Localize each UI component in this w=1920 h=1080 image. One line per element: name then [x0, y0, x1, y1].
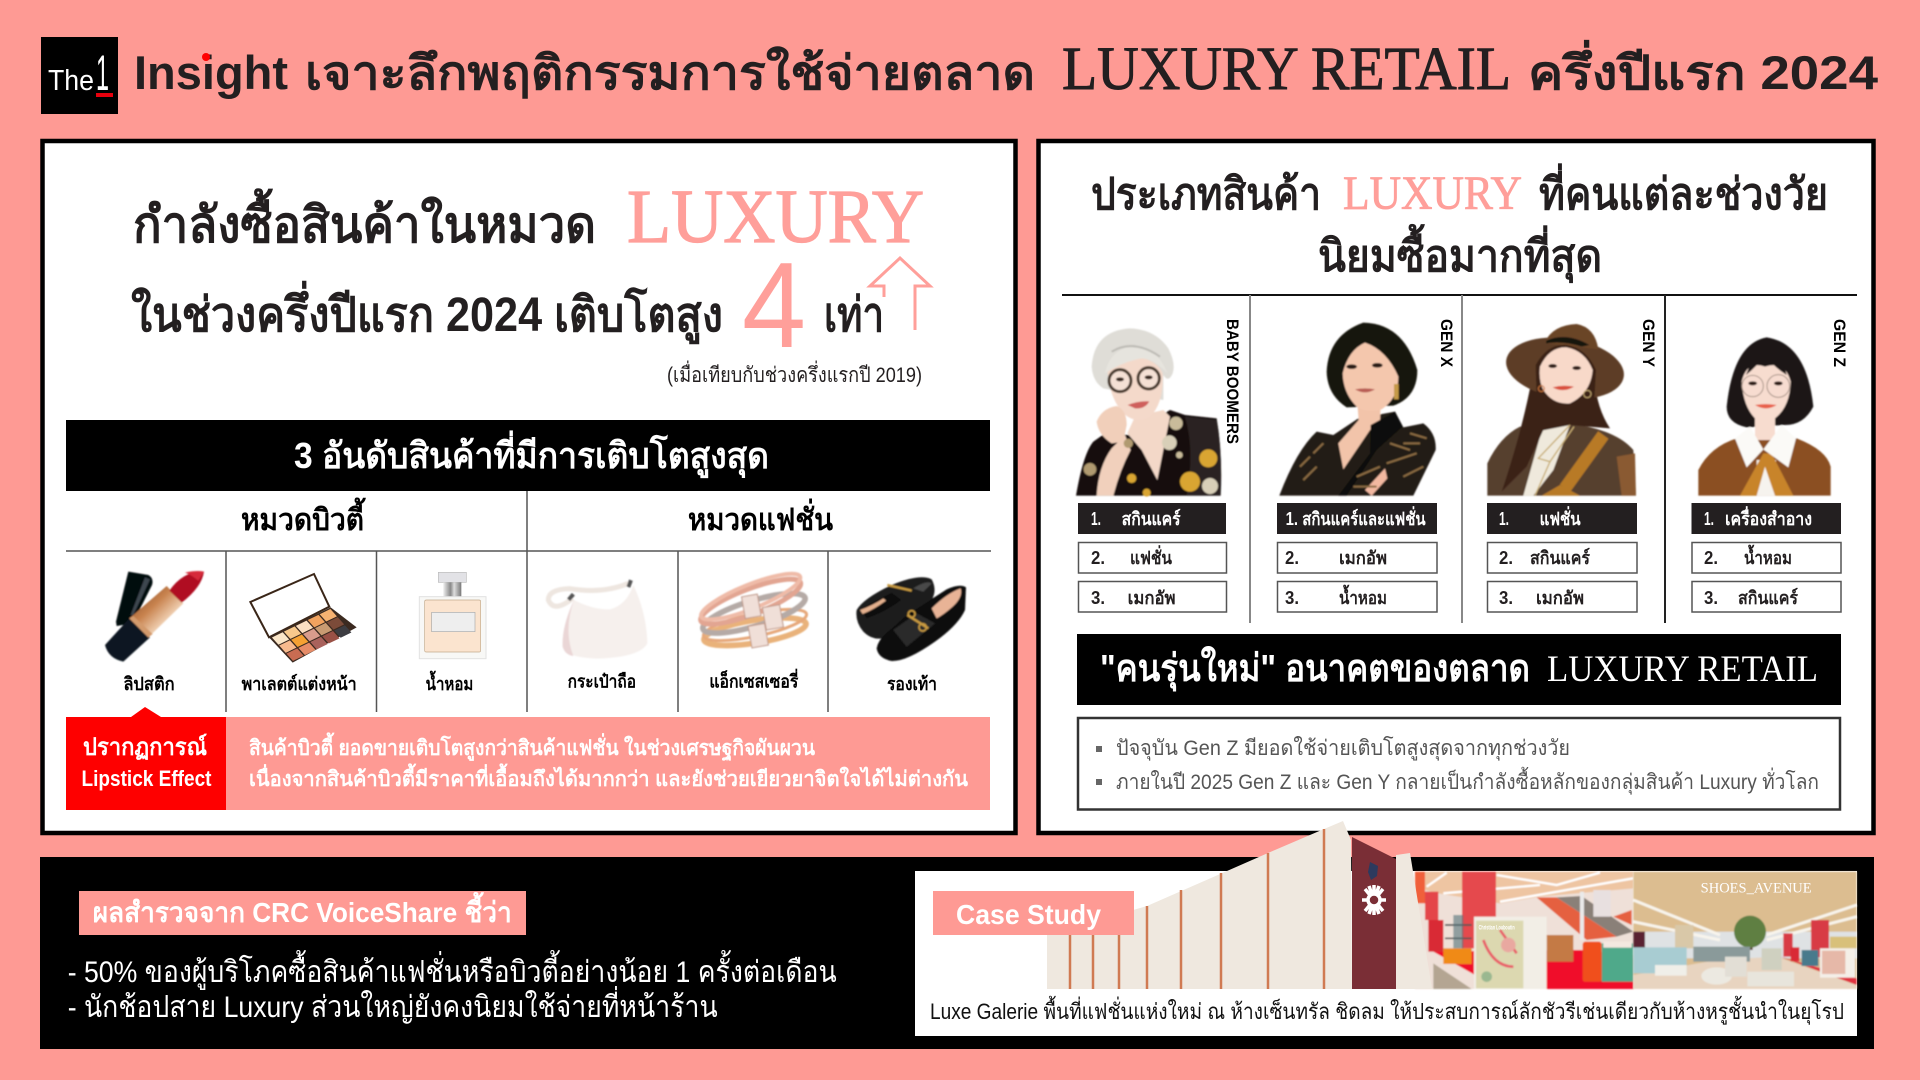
rank list	[1277, 503, 1437, 612]
rank list: 3.	[1285, 588, 1299, 608]
column: gen x	[1277, 319, 1456, 612]
photo: shoes avenue interior	[1633, 872, 1857, 989]
portrait: gen y	[1487, 324, 1636, 496]
icon: up arrow	[870, 258, 930, 330]
survey findings: - 50% ของผู้บริโภคซื้อสินค้าแฟชั่นหรือบิวตี้อย่างน้อย 1 ครั้งต่อเดือน	[68, 950, 837, 990]
headline: luxury spending: LUXURY	[627, 175, 924, 259]
rank list: เมกอัพ	[1536, 588, 1584, 608]
product: loafers: รองเท้า	[887, 674, 937, 694]
rank list: 3.	[1499, 588, 1513, 608]
rank list: 3.	[1091, 588, 1105, 608]
bullet box: ภายในปี 2025 Gen Z และ Gen Y กลายเป็นกำลังซื้อหลักของกลุ่มสินค้า Luxury ทั่วโลก	[1116, 767, 1819, 795]
callout: lipstick effect: ปรากฏการณ์	[83, 733, 207, 761]
callout: lipstick effect	[66, 707, 990, 810]
banner: new generation: LUXURY RETAIL	[1547, 649, 1818, 690]
title: เจาะลึกพฤติกรรมการใช้จ่ายตลาด	[305, 45, 1035, 99]
rank list: น้ำหอม	[1339, 584, 1387, 608]
rank list: น้ำหอม	[1744, 544, 1792, 568]
rank list: แฟชั่น	[1130, 545, 1173, 568]
heading: ประเภทสินค้า	[1091, 170, 1321, 219]
survey label	[79, 891, 526, 935]
label: case study: Case Study	[956, 899, 1101, 930]
photo: shoes avenue interior: SHOES_AVENUE	[1701, 880, 1812, 896]
case study card	[915, 821, 1857, 1036]
label: baby boomers: BABY BOOMERS	[1223, 319, 1242, 444]
product: lipstick	[105, 571, 204, 694]
callout: lipstick effect: เนื่องจากสินค้าบิวตี้มีราคาที่เอื้อมถึงได้มากกว่า และยังช่วยเยียวยาจิตใจได้ไม่ต่างกัน	[249, 763, 969, 791]
survey findings: - นักช้อปสาย Luxury ส่วนใหญ่ยังคงนิยมใช้จ่ายที่หน้าร้าน	[68, 986, 718, 1024]
label: gen z: GEN Z	[1830, 319, 1849, 367]
rank list: เครื่องสำอาง	[1725, 506, 1812, 529]
callout: lipstick effect: Lipstick Effect	[82, 766, 212, 791]
product: eyeshadow palette	[242, 574, 357, 694]
portrait: gen z	[1698, 337, 1831, 496]
rank list: 2.	[1499, 548, 1513, 568]
label: gen x: GEN X	[1437, 319, 1456, 368]
heading: LUXURY	[1343, 167, 1522, 220]
product: perfume: น้ำหอม	[426, 670, 473, 694]
heading: นิยมซื้อมากที่สุด	[1318, 223, 1602, 284]
rank list: 1. สกินแคร์และแฟชั่น	[1286, 506, 1426, 529]
product: bracelets	[696, 566, 809, 691]
rank list: 2.	[1091, 548, 1105, 568]
heading	[1091, 163, 1828, 284]
column: gen z	[1692, 319, 1849, 612]
photo: store interior one: Christian Louboutin	[1479, 925, 1515, 932]
panel: bottom band	[40, 821, 1874, 1049]
product: bracelets: แอ็กเซสเซอรี่	[709, 668, 799, 691]
product: perfume	[419, 572, 486, 694]
product: handbag	[548, 580, 647, 691]
logo: The 1	[41, 37, 118, 114]
label: gen y: GEN Y	[1639, 319, 1658, 368]
label: case study	[933, 891, 1134, 935]
rank list: 2.	[1704, 548, 1718, 568]
rank list	[1078, 503, 1226, 612]
headline: luxury spending	[131, 175, 924, 373]
rank list: เมกอัพ	[1339, 548, 1387, 568]
panel: products by generation	[1038, 141, 1874, 833]
category headings	[241, 497, 833, 537]
portrait: gen x	[1279, 323, 1436, 496]
banner: top 3 categories: 3 อันดับสินค้าที่มีการเติบโตสูงสุด	[294, 430, 769, 479]
headline: luxury spending: 4	[742, 237, 806, 373]
rank list: เมกอัพ	[1128, 588, 1176, 608]
headline: luxury spending: เท่า	[824, 289, 884, 342]
column: gen y	[1487, 319, 1658, 612]
panel: luxury growth	[42, 141, 1016, 833]
category headings: หมวดแฟชั่น	[688, 498, 833, 537]
rank list: แฟชั่น	[1540, 506, 1581, 529]
category headings: หมวดบิวตี้	[241, 497, 366, 537]
title: Insight	[134, 46, 288, 99]
title	[134, 36, 1878, 103]
rank list	[1487, 503, 1637, 612]
rank list: 3.	[1704, 588, 1718, 608]
logo: The 1: The	[48, 65, 94, 97]
headline: luxury spending: ในช่วงครึ่งปีแรก 2024 เติบโตสูง	[131, 280, 723, 345]
comparison note: (เมื่อเทียบกับช่วงครึ่งแรกปี 2019)	[667, 360, 922, 387]
rank list: สกินแคร์	[1122, 508, 1181, 529]
product: eyeshadow palette: พาเลตต์แต่งหน้า	[242, 673, 357, 694]
headline: luxury spending: กำลังซื้อสินค้าในหมวด	[133, 188, 596, 253]
portrait: baby boomer	[1076, 328, 1221, 497]
bullet box: ปัจจุบัน Gen Z มียอดใช้จ่ายเติบโตสูงสุดจากทุกช่วงวัย	[1116, 736, 1570, 761]
rank list: สกินแคร์	[1738, 587, 1798, 608]
rank list: 1.	[1091, 509, 1101, 529]
callout: lipstick effect: สินค้าบิวตี้ ยอดขายเติบโตสูงกว่าสินค้าแฟชั่น ในช่วงเศรษฐกิจผันผวน	[249, 732, 816, 762]
heading: ที่คนแต่ละช่วงวัย	[1539, 163, 1828, 219]
header	[41, 36, 1878, 114]
product: loafers	[856, 577, 966, 694]
column: baby boomers	[1076, 319, 1242, 612]
banner: top 3 categories	[66, 420, 990, 491]
survey findings	[68, 950, 837, 1024]
title: ครึ่งปีแรก 2024	[1528, 39, 1878, 99]
photo: building facade	[1047, 821, 1432, 989]
photo: store interior one	[1415, 872, 1633, 989]
rank list: สกินแคร์	[1530, 547, 1590, 568]
banner: new generation: "คนรุ่นใหม่" อนาคตของตลาด	[1100, 646, 1530, 692]
bullet box	[1078, 718, 1840, 810]
banner: new generation	[1077, 634, 1841, 705]
rank list: 1.	[1499, 509, 1509, 529]
product: handbag: กระเป๋าถือ	[568, 671, 636, 691]
survey label: ผลสำรวจจาก CRC VoiceShare ชี้ว่า	[93, 891, 512, 928]
rank list: 1.	[1704, 509, 1714, 529]
rank list	[1692, 503, 1841, 612]
logo: The 1: 1	[96, 45, 109, 101]
product: lipstick: ลิปสติก	[123, 674, 175, 694]
rank list: 2.	[1285, 548, 1299, 568]
title: LUXURY RETAIL	[1062, 36, 1511, 103]
